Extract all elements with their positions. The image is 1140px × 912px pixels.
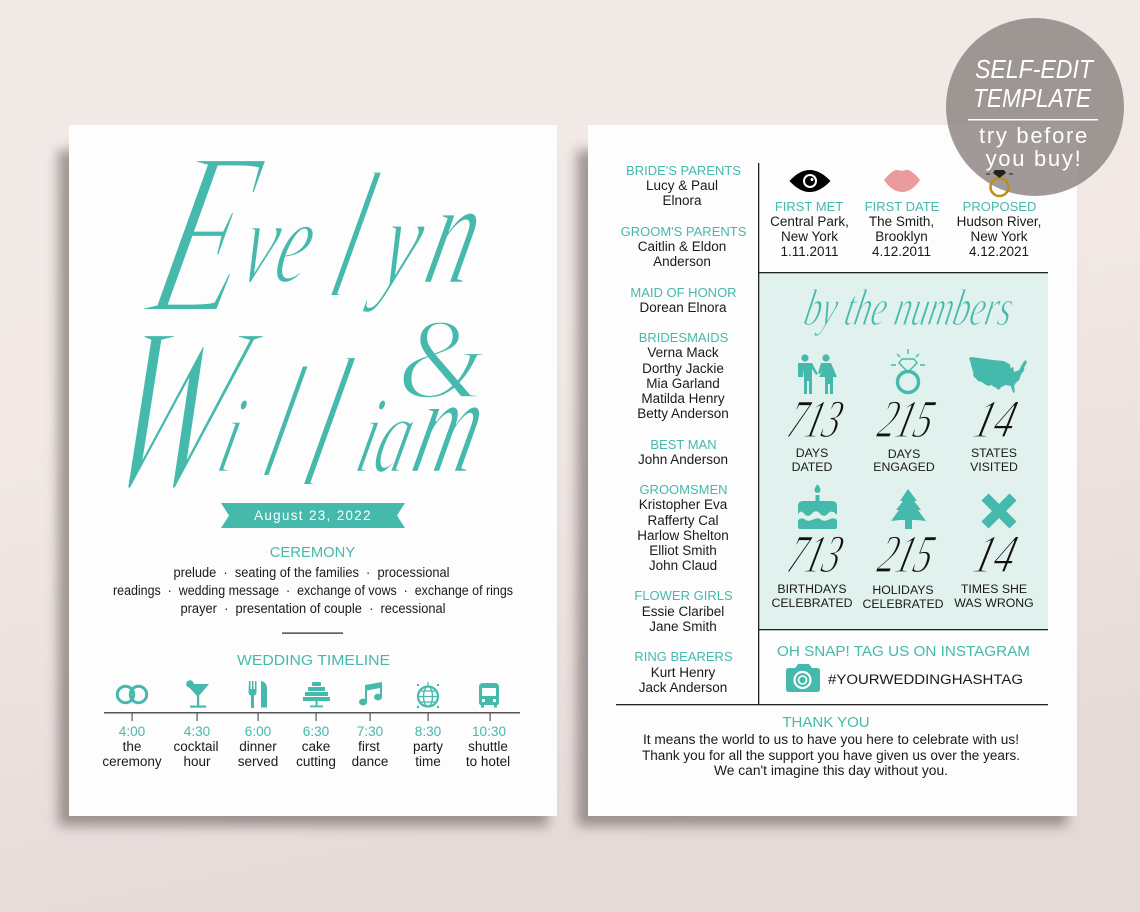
timeline labels: dinner xyxy=(239,739,277,754)
key dates: 4.12.2011 xyxy=(872,244,931,259)
wedding party list: Matilda Henry xyxy=(641,391,725,406)
timeline labels xyxy=(102,724,510,769)
wedding party list xyxy=(621,163,747,695)
title: couple names: i xyxy=(208,376,257,497)
icon: cocktail xyxy=(186,680,209,708)
title: couple names xyxy=(82,104,519,539)
heading: ceremony: CEREMONY xyxy=(270,545,355,561)
key dates: New York xyxy=(970,229,1028,244)
wedding party list: John Claud xyxy=(649,558,717,573)
stat: times she was wrong: 14 xyxy=(968,524,1024,584)
stat: birthdays celebrated: 713 xyxy=(782,524,850,584)
title: couple names: v xyxy=(230,176,296,309)
icon: cake xyxy=(303,682,330,707)
icon: engagement ring xyxy=(891,349,925,392)
key dates: PROPOSED xyxy=(963,199,1036,214)
key dates: FIRST MET xyxy=(775,199,843,214)
timeline labels: shuttle xyxy=(468,739,508,754)
stat: states visited: 14 xyxy=(968,389,1024,449)
title: couple names: y xyxy=(361,169,441,313)
wedding party list: Betty Anderson xyxy=(637,406,729,421)
stat: states visited xyxy=(968,357,1027,474)
wedding party list: Lucy & Paul xyxy=(646,178,718,193)
wedding party list: MAID OF HONOR xyxy=(630,285,737,300)
thank you message: Thank you for all the support you have given us over the years. xyxy=(642,748,1020,763)
timeline labels: 10:30 xyxy=(472,724,506,739)
icon: cake xyxy=(798,484,837,529)
key dates: The Smith, xyxy=(869,214,934,229)
timeline labels: 6:00 xyxy=(245,724,272,739)
icon: tree xyxy=(891,489,926,529)
badge: self-edit template: try before xyxy=(979,123,1089,148)
title: couple names: E xyxy=(128,104,284,364)
icon: proposal ring xyxy=(986,170,1013,196)
key dates: Hudson River, xyxy=(957,214,1041,229)
instagram call to action: OH SNAP! TAG US ON INSTAGRAM xyxy=(777,644,1030,660)
stat: holidays celebrated: HOLIDAYS xyxy=(872,583,934,597)
key dates: 1.11.2011 xyxy=(780,244,839,259)
timeline xyxy=(102,680,520,769)
stat: times she was wrong: WAS WRONG xyxy=(954,596,1034,610)
icon: fork and knife xyxy=(248,681,267,708)
stat: days engaged xyxy=(872,349,941,474)
stat: birthdays celebrated: BIRTHDAYS xyxy=(777,582,847,596)
icon: music notes xyxy=(359,682,382,705)
timeline labels: 4:30 xyxy=(184,724,211,739)
wedding party list: Mia Garland xyxy=(646,376,720,391)
wedding party list: BRIDESMAIDS xyxy=(639,330,729,345)
title: couple names: l xyxy=(312,135,395,339)
stat: days dated: DAYS xyxy=(796,446,828,460)
wedding party list: Dorthy Jackie xyxy=(642,361,724,376)
wedding party list: Rafferty Cal xyxy=(647,513,719,528)
timeline labels: party xyxy=(413,739,443,754)
wedding party list: Jack Anderson xyxy=(639,680,727,695)
icon: couple xyxy=(798,354,837,394)
date ribbon xyxy=(221,503,405,528)
timeline labels: the xyxy=(123,739,141,754)
wedding party list: BRIDE'S PARENTS xyxy=(626,163,741,178)
timeline labels: cake xyxy=(302,739,330,754)
badge: self-edit template: you buy! xyxy=(986,146,1082,171)
panel: right card xyxy=(588,125,1077,816)
title: couple names: l xyxy=(246,332,320,514)
stat: days engaged: DAYS xyxy=(888,447,920,461)
wedding party list: Essie Claribel xyxy=(642,604,724,619)
timeline labels: 7:30 xyxy=(357,724,384,739)
wedding party list: Caitlin & Eldon xyxy=(638,239,726,254)
ceremony order: prelude · seating of the families · processional xyxy=(174,565,450,580)
key dates: 4.12.2021 xyxy=(969,244,1029,259)
icon: eye xyxy=(790,170,830,192)
wedding party list: RING BEARERS xyxy=(634,649,733,664)
wedding party list: Anderson xyxy=(653,254,711,269)
timeline labels: time xyxy=(415,754,441,769)
timeline labels: 6:30 xyxy=(303,724,330,739)
icon: lips xyxy=(884,170,920,192)
wedding party list: Dorean Elnora xyxy=(639,300,727,315)
badge: self-edit template: TEMPLATE xyxy=(973,83,1092,113)
stat: times she was wrong: TIMES SHE xyxy=(961,582,1027,596)
timeline labels: first xyxy=(358,739,380,754)
icon: usa map xyxy=(969,357,1027,393)
wedding party list: Verna Mack xyxy=(647,345,719,360)
heading: by the numbers: by the numbers xyxy=(799,280,1019,337)
timeline labels: dance xyxy=(352,754,388,769)
stat: states visited: VISITED xyxy=(970,460,1018,474)
timeline labels: hour xyxy=(183,754,211,769)
title: couple names: n xyxy=(412,149,500,316)
key dates: FIRST DATE xyxy=(865,199,940,214)
timeline labels: cutting xyxy=(296,754,336,769)
title: couple names: l xyxy=(285,318,370,528)
wedding party list: Kristopher Eva xyxy=(639,497,728,512)
stat: birthdays celebrated: CELEBRATED xyxy=(771,596,853,610)
timeline labels: 8:30 xyxy=(415,724,442,739)
title: couple names: W xyxy=(82,279,280,539)
thank you message: It means the world to us to have you here to celebrate with us! xyxy=(643,732,1019,747)
stat: days dated: 713 xyxy=(782,389,850,449)
timeline labels: served xyxy=(238,754,278,769)
wedding party list: GROOM'S PARENTS xyxy=(621,224,747,239)
wedding party list: Jane Smith xyxy=(649,619,717,634)
stat: days dated xyxy=(782,354,850,474)
panel: left card xyxy=(69,104,557,816)
icon: bus xyxy=(479,683,499,708)
timeline labels: cocktail xyxy=(173,739,219,754)
ceremony order: prayer · presentation of couple · recessional xyxy=(180,601,446,616)
key dates xyxy=(770,199,1041,259)
key dates: New York xyxy=(781,229,838,244)
icon: cross xyxy=(985,497,1013,525)
key dates: Brooklyn xyxy=(875,229,928,244)
stat: holidays celebrated: 215 xyxy=(872,524,941,584)
wedding party list: Kurt Henry xyxy=(651,665,716,680)
title: couple names: e xyxy=(264,176,330,309)
wedding party list: GROOMSMEN xyxy=(639,482,728,497)
thank you message xyxy=(642,714,1020,778)
date ribbon: August 23, 2022 xyxy=(254,508,372,523)
stat: days dated: DATED xyxy=(792,460,832,474)
wedding party list: Elliot Smith xyxy=(649,543,717,558)
icon: camera xyxy=(786,664,820,692)
timeline labels: to hotel xyxy=(466,754,510,769)
card shadows xyxy=(58,150,1067,826)
stat: birthdays celebrated xyxy=(771,484,853,610)
wedding party list: FLOWER GIRLS xyxy=(634,588,733,603)
thank you message: THANK YOU xyxy=(782,714,870,731)
heading: wedding timeline: WEDDING TIMELINE xyxy=(237,653,390,669)
stat: days engaged: ENGAGED xyxy=(873,460,935,474)
wedding party list: BEST MAN xyxy=(650,437,717,452)
wedding party list: Elnora xyxy=(662,193,702,208)
stat: times she was wrong xyxy=(954,497,1034,610)
title: couple names: m xyxy=(400,347,502,503)
ceremony order: readings · wedding message · exchange of vows · exchange of rings xyxy=(113,583,513,598)
icon: disco ball xyxy=(417,682,439,708)
instagram call to action: #YOURWEDDINGHASHTAG xyxy=(828,672,1023,687)
key dates: Central Park, xyxy=(770,214,849,229)
stat: states visited: STATES xyxy=(971,446,1017,460)
thank you message: We can't imagine this day without you. xyxy=(714,763,948,778)
ceremony order xyxy=(113,565,513,616)
icon: rings xyxy=(117,686,147,703)
stat: days engaged: 215 xyxy=(872,389,941,449)
stat: holidays celebrated xyxy=(862,489,944,611)
badge: self-edit template xyxy=(946,18,1124,196)
wedding party list: Harlow Shelton xyxy=(637,528,729,543)
badge: self-edit template: SELF-EDIT xyxy=(975,54,1095,84)
title: couple names: i xyxy=(346,376,395,497)
stat: holidays celebrated: CELEBRATED xyxy=(862,597,944,611)
timeline labels: 4:00 xyxy=(119,724,146,739)
title: couple names: a xyxy=(364,376,428,497)
panel: numbers background xyxy=(759,273,1048,629)
timeline labels: ceremony xyxy=(102,754,162,769)
wedding party list: John Anderson xyxy=(638,452,728,467)
instagram call to action xyxy=(777,644,1030,692)
title: couple names: & xyxy=(397,296,487,424)
